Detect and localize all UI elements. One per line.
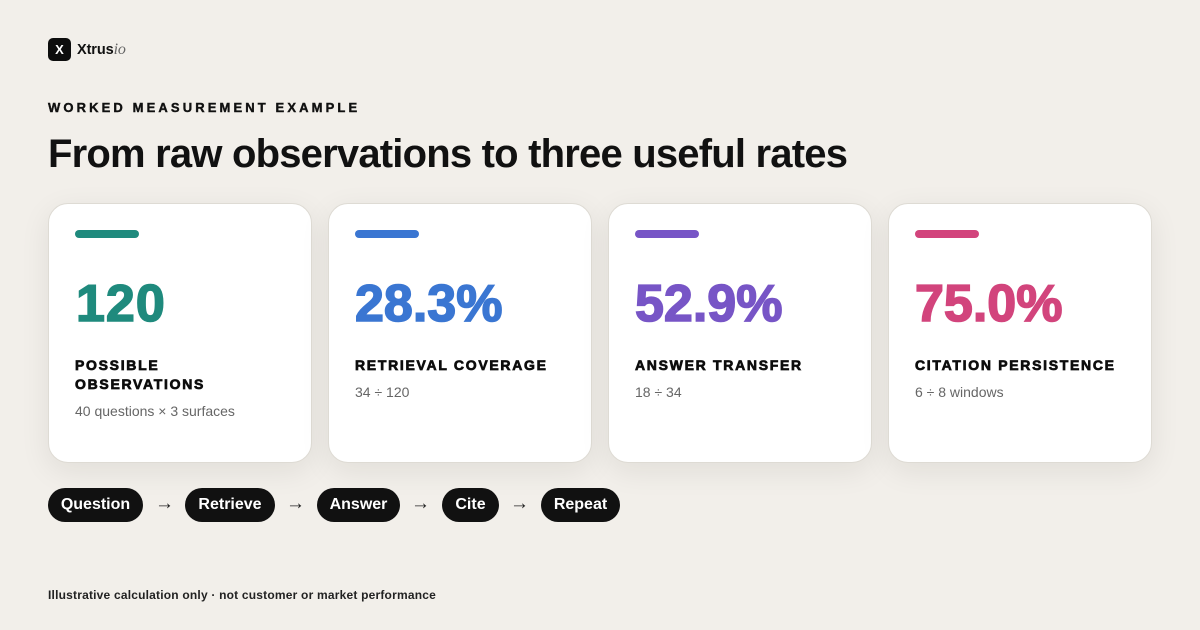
arrow: → bbox=[155, 493, 174, 514]
step: Answer bbox=[317, 488, 400, 522]
metric: 52.9%: 52.9% bbox=[635, 275, 782, 333]
panel: retrieval coverage bbox=[328, 203, 592, 463]
footnote: Illustrative calculation only · not customer or market performance bbox=[48, 588, 436, 602]
metric label: POSSIBLE OBSERVATIONS bbox=[75, 357, 205, 392]
calculation note: 18 ÷ 34 bbox=[635, 384, 682, 400]
logo bbox=[48, 38, 126, 61]
eyebrow heading: WORKED MEASUREMENT EXAMPLE bbox=[48, 100, 360, 115]
panel: answer transfer bbox=[608, 203, 872, 463]
metric label: RETRIEVAL COVERAGE bbox=[355, 357, 548, 373]
metric label: CITATION PERSISTENCE bbox=[915, 357, 1116, 373]
step: Question bbox=[48, 488, 143, 522]
icon: logo mark bbox=[48, 38, 71, 61]
arrow: → bbox=[510, 493, 529, 514]
metric label: ANSWER TRANSFER bbox=[635, 357, 803, 373]
process flow bbox=[48, 488, 620, 522]
accent bar: blue bbox=[355, 230, 419, 238]
step: Cite: Cite bbox=[455, 496, 486, 513]
arrow: → bbox=[286, 493, 305, 514]
step: Question: Question bbox=[61, 496, 130, 513]
step: Repeat: Repeat bbox=[554, 496, 607, 513]
step: Repeat bbox=[541, 488, 620, 522]
title: From raw observations to three useful rates bbox=[48, 132, 847, 176]
accent bar: teal bbox=[75, 230, 139, 238]
step: Cite bbox=[442, 488, 499, 522]
icon: logo mark: X bbox=[55, 42, 64, 57]
logo wordmark: Xtrusio bbox=[77, 41, 126, 58]
panel: possible observations bbox=[48, 203, 312, 463]
step: Retrieve: Retrieve bbox=[198, 496, 262, 513]
step: Retrieve bbox=[185, 488, 275, 522]
step: Answer: Answer bbox=[330, 496, 387, 513]
metric: 120: 120 bbox=[76, 275, 166, 333]
calculation note: 40 questions × 3 surfaces bbox=[75, 403, 235, 419]
metric: 28.3%: 28.3% bbox=[355, 275, 502, 333]
metric: 75.0%: 75.0% bbox=[915, 275, 1062, 333]
calculation note: 34 ÷ 120 bbox=[355, 384, 409, 400]
accent bar: purple bbox=[635, 230, 699, 238]
arrow: → bbox=[411, 493, 430, 514]
panel: citation persistence bbox=[888, 203, 1152, 463]
calculation note: 6 ÷ 8 windows bbox=[915, 384, 1004, 400]
accent bar: pink bbox=[915, 230, 979, 238]
